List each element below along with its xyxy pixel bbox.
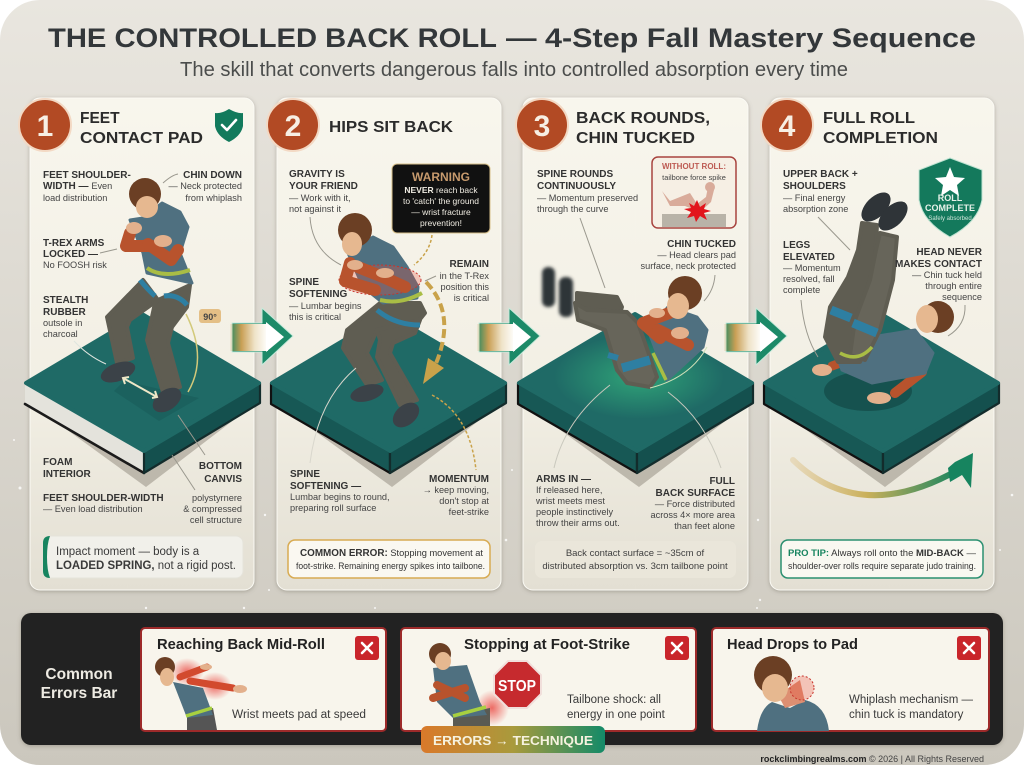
panel: step 4 <box>761 98 999 590</box>
card 3 text: Whiplash mechanism — <box>849 694 973 706</box>
step 2 number <box>267 99 319 151</box>
callout: feet shoulder width: WIDTH — Even <box>43 181 112 192</box>
badge: roll complete <box>919 158 982 237</box>
callout: momentum: don't stop at <box>439 496 489 506</box>
card 2 text: energy in one point <box>567 709 666 721</box>
callout: full back surface <box>650 476 736 531</box>
callout: arms in: ARMS IN — <box>536 474 591 485</box>
callout: gravity <box>289 169 358 214</box>
note: pro tip <box>781 540 983 578</box>
foam pad with glow <box>518 314 753 487</box>
icon: stop sign: STOP <box>498 678 536 695</box>
step 4 number <box>761 99 813 151</box>
double arrow: shoulder width <box>123 377 157 398</box>
callout: full back surface: BACK SURFACE <box>656 488 735 499</box>
foam pad <box>764 314 999 487</box>
90 degree arc: 90° <box>203 312 217 322</box>
callout: spine rounds: SPINE ROUNDS <box>537 169 613 180</box>
note: common error: foot-strike. Remaining energy spikes into tailbone. <box>296 561 485 571</box>
note: contact surface <box>535 541 736 578</box>
momentum arrow <box>414 235 476 470</box>
callout: spine softening: SOFTENING <box>289 289 348 300</box>
title <box>48 23 976 53</box>
callout: spine softening lower: SOFTENING — <box>290 481 361 492</box>
card 3 close icon <box>957 636 981 660</box>
note: common error: COMMON ERROR: Stopping movement at <box>300 547 483 559</box>
callout: feet shoulder width lower: — Even load distribution <box>43 504 143 514</box>
callout: gravity: — Work with it, <box>289 193 351 203</box>
badge: roll complete: ROLL <box>938 193 963 203</box>
card 1 close icon <box>355 636 379 660</box>
note: loaded spring: Impact moment — body is a <box>56 546 200 558</box>
footer credit: rockclimbingrealms.com © 2026 | All Rights Reserved <box>760 754 984 764</box>
foam pad <box>25 314 260 487</box>
panel: step 1 <box>19 98 260 590</box>
callout: chin down: — Neck protected <box>168 181 242 191</box>
arrow: step 3 to 4 <box>724 308 787 365</box>
icon: stop sign <box>494 661 541 708</box>
note: pro tip: PRO TIP: Always roll onto the MID-BACK — <box>788 548 976 559</box>
callout: arms in: If released here, <box>536 485 602 495</box>
card 2 title: Stopping at Foot-Strike <box>464 637 630 653</box>
callout: polystyrene <box>183 493 242 525</box>
callout: chin down: from whiplash <box>185 193 242 203</box>
callout: feet shoulder width lower <box>43 493 164 514</box>
callout: arms in: throw their arms out. <box>536 518 620 528</box>
callout: momentum: → keep moving, <box>423 485 489 495</box>
highlight: rib impact zone <box>339 265 421 295</box>
bar heading: Errors Bar <box>41 685 117 702</box>
callout: arms in: wrist meets mest <box>535 496 605 506</box>
callout: arms in <box>535 474 620 528</box>
note: pro tip: shoulder-over rolls require separate judo training. <box>788 561 976 571</box>
callout: full back surface: FULL <box>709 476 735 487</box>
inset: without roll: tailbone force spike <box>662 173 726 182</box>
callout: momentum: MOMENTUM <box>429 474 489 485</box>
callout: stealth rubber: STEALTH <box>43 295 88 306</box>
callout: head never: sequence <box>942 292 982 302</box>
callout: chin tucked: surface, neck protected <box>640 261 736 271</box>
warning box <box>392 164 490 233</box>
callout: legs elevated: LEGS <box>783 240 811 251</box>
callout: stealth rubber: charcoal <box>43 329 78 339</box>
card 2 text <box>567 694 666 721</box>
note: contact surface: Back contact surface = ~35cm of <box>566 548 705 559</box>
callout: remain: REMAIN <box>450 259 489 270</box>
step 3 heading: CHIN TUCKED <box>576 130 695 147</box>
callout: legs elevated: ELEVATED <box>783 252 835 263</box>
card 3 text: chin tuck is mandatory <box>849 709 964 721</box>
callout: bottom canvis <box>199 461 242 485</box>
callout: spine softening lower: Lumbar begins to round, <box>290 492 390 502</box>
panel: step 3 <box>516 98 753 590</box>
step 1 number: 1 <box>37 110 53 143</box>
callout: remain <box>440 259 489 303</box>
callout: head never <box>895 247 983 302</box>
warning box: WARNING <box>412 170 470 184</box>
callout: head never: HEAD NEVER <box>916 247 983 258</box>
callout: t-rex arms: No FOOSH risk <box>43 260 107 270</box>
card 3 title: Head Drops to Pad <box>727 637 858 653</box>
step 1 heading: FEET <box>80 110 120 127</box>
step 4 heading: COMPLETION <box>823 130 938 147</box>
callout: momentum: feet-strike <box>449 507 489 517</box>
error card 1 <box>141 628 386 731</box>
step 4 number: 4 <box>779 110 796 143</box>
note: common error <box>288 540 490 578</box>
step 3 heading <box>576 110 710 147</box>
warning box: NEVER reach back <box>404 185 478 195</box>
bar heading <box>41 666 117 702</box>
callout: gravity: not against it <box>289 204 342 214</box>
figure: back rounding <box>542 267 707 388</box>
warning box: — wrist fracture <box>411 207 471 217</box>
callout: spine rounds: through the curve <box>537 204 609 214</box>
card 2 figure <box>429 643 509 730</box>
callout: bottom canvis: CANVIS <box>204 474 242 485</box>
foam pad <box>271 314 506 487</box>
callout: foam interior: FOAM <box>43 457 72 468</box>
callout: full back surface: across 4× more area <box>650 510 736 520</box>
step 4 heading: FULL ROLL <box>823 110 915 127</box>
card 1 text: Wrist meets pad at speed <box>232 709 366 721</box>
callout: t-rex arms: LOCKED — <box>43 249 98 260</box>
callout: gravity: GRAVITY IS <box>289 169 345 180</box>
callout: upper back <box>783 169 858 214</box>
error card 2 <box>401 628 696 731</box>
callout: spine softening lower: SPINE <box>290 469 320 480</box>
figure: landing on feet <box>98 178 192 417</box>
callout: legs elevated: — Momentum <box>783 263 841 273</box>
badge: errors to technique: ERRORS → TECHNIQUE <box>433 733 593 748</box>
step 3 heading: BACK ROUNDS, <box>576 110 710 127</box>
badge: roll complete: Safely absorbed <box>928 216 972 222</box>
callout: stealth rubber: outsole in <box>43 318 82 328</box>
callout: polystyrene: & compressed <box>183 504 242 514</box>
callout: upper back: SHOULDERS <box>783 181 846 192</box>
common errors bar <box>21 613 1003 745</box>
callout: foam interior: INTERIOR <box>43 469 92 480</box>
icon: green shield check <box>215 109 243 142</box>
callout: chin tucked <box>640 239 736 271</box>
callout: feet shoulder width: FEET SHOULDER- <box>43 170 131 181</box>
step 4 heading <box>823 110 938 147</box>
card 1 title: Reaching Back Mid-Roll <box>157 637 325 653</box>
callout: polystyrene: cell structure <box>190 515 242 525</box>
callout: upper back: UPPER BACK + <box>783 169 858 180</box>
arrow: step 2 to 3 <box>477 308 540 365</box>
90 degree arc <box>186 309 221 392</box>
badge: errors to technique <box>421 726 605 753</box>
error card 3 <box>712 628 989 731</box>
figure: full roll <box>812 187 954 404</box>
callout: spine softening lower <box>290 469 390 513</box>
warning box: prevention! <box>420 218 462 228</box>
warning box: to 'catch' the ground <box>403 196 479 206</box>
card 3 text <box>849 694 973 721</box>
bar heading: Common <box>45 666 113 683</box>
title: — 4-Step Fall Mastery Sequence <box>506 23 976 53</box>
callout: remain: position this <box>440 282 489 292</box>
callout: spine softening: — Lumbar begins <box>289 301 362 311</box>
callout: head never: MAKES CONTACT <box>895 259 982 270</box>
callout: spine softening: SPINE <box>289 277 319 288</box>
callout: chin tucked: — Head clears pad <box>657 250 736 260</box>
callout: head never: — Chin tuck held <box>912 270 982 280</box>
step 2 heading: HIPS SIT BACK <box>329 119 454 136</box>
step 3 number <box>516 99 568 151</box>
callout: legs elevated <box>783 240 841 295</box>
title: THE CONTROLLED BACK ROLL <box>48 23 497 53</box>
callout: feet shoulder width: load distribution <box>43 193 107 203</box>
callout: gravity: YOUR FRIEND <box>289 181 358 192</box>
callout: stealth rubber: RUBBER <box>43 307 87 318</box>
callout: head never: through entire <box>925 281 982 291</box>
background sparkle dots <box>13 439 1013 609</box>
callout: legs elevated: resolved, fall <box>783 274 835 284</box>
step 2 number: 2 <box>285 110 301 143</box>
panel: step 2 <box>267 98 506 590</box>
arrow: step 1 to 2 <box>230 308 293 365</box>
step 3 number: 3 <box>534 110 550 143</box>
callout: remain: in the T-Rex <box>440 271 489 281</box>
callout: legs elevated: complete <box>783 285 820 295</box>
card 1 figure <box>155 657 247 730</box>
callout: upper back: absorption zone <box>783 204 848 214</box>
card 2 text: Tailbone shock: all <box>567 694 661 706</box>
figure: hips sitting back <box>338 213 425 432</box>
subtitle: The skill that converts dangerous falls into controlled absorption every time <box>180 59 848 81</box>
note: loaded spring: LOADED SPRING, not a rigid post. <box>56 560 236 572</box>
step 1 heading <box>80 110 203 147</box>
callout: chin tucked: CHIN TUCKED <box>667 239 736 250</box>
callout: spine rounds <box>537 169 638 214</box>
callout: feet shoulder width lower: FEET SHOULDER-WIDTH <box>43 493 164 504</box>
callout: arms in: people instinctively <box>536 507 614 517</box>
callout: momentum <box>423 474 489 517</box>
callout: bottom canvis: BOTTOM <box>199 461 242 472</box>
callout: t-rex arms <box>43 238 107 270</box>
badge: roll complete: COMPLETE <box>925 203 975 213</box>
inset: without roll <box>652 157 736 228</box>
callout: spine softening lower: preparing roll surface <box>290 503 376 513</box>
callout: foam interior <box>43 457 92 480</box>
callout: upper back: — Final energy <box>783 193 846 203</box>
callout: spine softening: this is critical <box>289 312 341 322</box>
callout: full back surface: than feet alone <box>674 521 735 531</box>
note: contact surface: distributed absorption vs. 3cm tailbone point <box>542 561 728 572</box>
roll arrow <box>793 453 973 495</box>
callout: feet shoulder width <box>43 170 131 203</box>
card 2 close icon <box>665 636 689 660</box>
callout: stealth rubber <box>43 295 88 339</box>
callout: spine rounds: — Momentum preserved <box>537 193 638 203</box>
callout: remain: is critical <box>454 293 489 303</box>
step 1 heading: CONTACT PAD <box>80 130 203 147</box>
inset: without roll: WITHOUT ROLL: <box>662 162 726 171</box>
callout: chin down <box>168 170 242 203</box>
card 3 figure <box>754 656 829 731</box>
callout: chin down: CHIN DOWN <box>183 170 242 181</box>
step 1 number <box>19 99 71 151</box>
callout: polystyrene: polystyrnere <box>192 493 242 503</box>
note: loaded spring <box>43 536 243 578</box>
callout: full back surface: — Force distributed <box>655 499 735 509</box>
callout: t-rex arms: T-REX ARMS <box>43 238 105 249</box>
callout: spine rounds: CONTINUOUSLY <box>537 181 616 192</box>
callout: spine softening <box>289 277 362 322</box>
